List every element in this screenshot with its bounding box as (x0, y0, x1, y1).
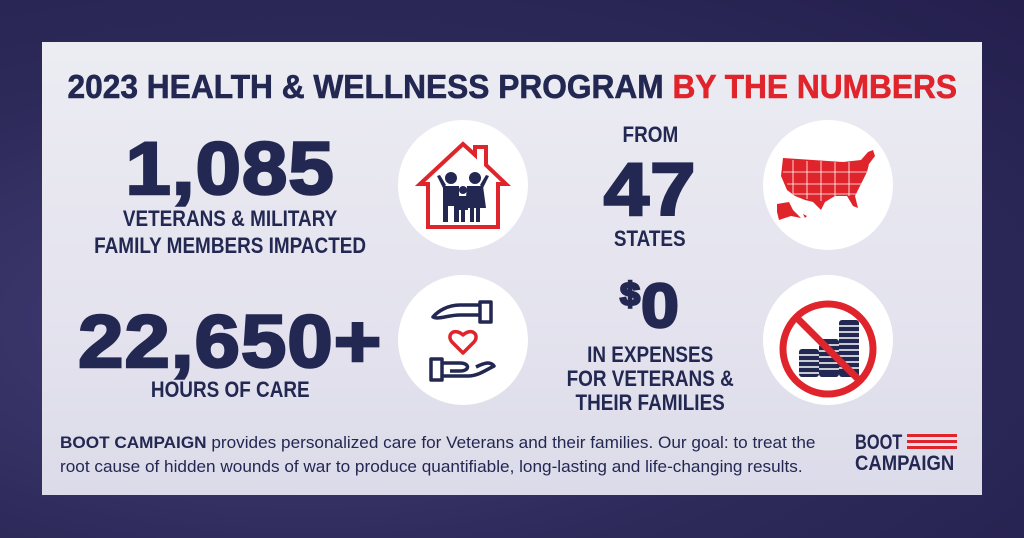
icon: hands with heart (398, 275, 528, 405)
icon: house with family (398, 120, 528, 250)
label: veterans impacted (94, 206, 366, 258)
icon: no money (763, 275, 893, 405)
label: expenses: IN EXPENSES (587, 342, 713, 367)
stat: $0: $0 (620, 272, 680, 341)
label: veterans impacted: FAMILY MEMBERS IMPACTED (94, 233, 366, 258)
stat: 1,085: 1,085 (125, 127, 335, 210)
stat: 22,650+: 22,650+ (78, 300, 382, 383)
label: expenses: THEIR FAMILIES (575, 390, 725, 415)
logo: boot campaign (855, 431, 957, 475)
panel: main card (42, 42, 982, 495)
label: from: FROM (622, 122, 678, 147)
text block: mission statement: BOOT CAMPAIGN provides personalized care for Veterans and their families. Our goal: to treat the (60, 433, 815, 452)
label: veterans impacted: VETERANS & MILITARY (123, 206, 337, 231)
label: expenses: FOR VETERANS & (566, 366, 734, 391)
title: 2023 HEALTH & WELLNESS PROGRAM BY THE NUMBERS (67, 68, 957, 105)
logo: boot campaign: BOOT (855, 431, 902, 454)
text block: mission statement (60, 433, 815, 476)
label: expenses (566, 342, 734, 415)
label: states: STATES (614, 226, 686, 251)
stat: 47: 47 (604, 148, 696, 231)
text block: mission statement: root cause of hidden wounds of war to produce quantifiable, long-lasting and life-changing results. (60, 457, 803, 476)
label: hours of care: HOURS OF CARE (151, 377, 309, 402)
logo: boot campaign: CAMPAIGN (855, 452, 954, 475)
icon: US map (763, 120, 893, 250)
